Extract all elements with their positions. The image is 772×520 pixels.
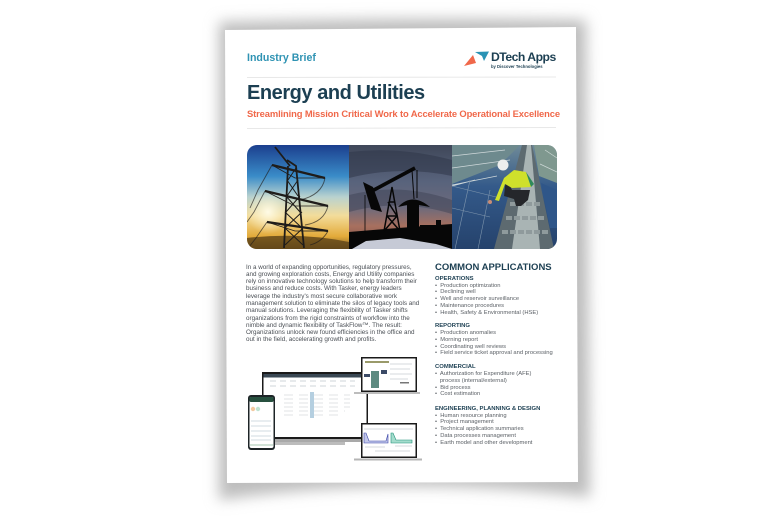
list: operations: OPERATIONS — [435, 276, 474, 282]
photo: oil pump jack — [349, 145, 452, 249]
list: operations: • Maintenance procedures — [435, 303, 504, 309]
lower small laptop — [354, 423, 422, 460]
list: engineering: • Earth model and other development — [435, 440, 532, 446]
intro paragraph: organizations from the rigid constraints of workflow into the — [246, 315, 410, 322]
upper small laptop — [354, 357, 420, 394]
list: reporting: REPORTING — [435, 323, 470, 329]
logo icon — [464, 52, 489, 66]
product device mockups — [248, 357, 422, 460]
list: reporting: • Morning report — [435, 337, 478, 343]
connector bar — [366, 394, 368, 423]
divider lines — [247, 77, 556, 128]
list: commercial — [435, 364, 532, 397]
logo wordmark: by Discover Technologies — [491, 64, 543, 69]
list: commercial: • Authorization for Expenditure (AFE) — [435, 371, 531, 377]
list: engineering: • Technical application summaries — [435, 426, 524, 432]
list: operations: • Production optimization — [435, 282, 501, 288]
intro paragraph: leverage the industry's most secure collaborative work — [246, 293, 397, 300]
list: commercial: process (internal/external) — [440, 378, 507, 384]
list: engineering: • Project management — [435, 419, 494, 425]
intro paragraph: business and reduce costs. With Tasker, energy leaders — [246, 285, 402, 292]
list: operations: • Health, Safety & Environmental (HSE) — [435, 310, 538, 316]
list: operations: • Declining well — [435, 289, 476, 295]
heading: Industry Brief: Industry Brief — [247, 52, 316, 64]
title: Energy and Utilities — [247, 82, 425, 104]
intro paragraph: and growing exploration costs, Energy and Utility companies — [246, 271, 414, 278]
list: reporting — [435, 323, 553, 356]
list: operations — [435, 276, 538, 316]
phone — [248, 395, 275, 450]
list: engineering: • Human resource planning — [435, 412, 507, 418]
list: reporting: • Coordinating well reviews — [435, 344, 506, 350]
list: engineering: ENGINEERING, PLANNING & DESIGN — [435, 406, 540, 412]
list: engineering — [435, 406, 540, 446]
logo wordmark: DTech Apps — [491, 50, 556, 64]
list: commercial: COMMERCIAL — [435, 364, 476, 370]
subtitle: Streamlining Mission Critical Work to Accelerate Operational Excellence — [247, 108, 560, 118]
photo: solar panels and worker — [452, 145, 557, 249]
intro paragraph — [246, 264, 419, 343]
list: engineering: • Data processes management — [435, 433, 516, 439]
photo: power pylon — [246, 145, 349, 249]
hero image strip — [246, 145, 557, 249]
intro paragraph: manual solutions. Leveraging the flexibility of Tasker shifts — [246, 307, 408, 314]
intro paragraph: nimble and dynamic flexibility of TaskFlow™. The result: — [246, 322, 402, 329]
intro paragraph: out in the field, accelerating growth and profits. — [246, 336, 376, 343]
intro paragraph: management solution to eliminate the silos of legacy tools and — [246, 300, 419, 307]
list: reporting: • Production anomalies — [435, 330, 496, 336]
page — [225, 27, 578, 483]
intro paragraph: Organizations unlock new found efficiencies in the office and — [246, 329, 414, 336]
list: reporting: • Field service ticket approval and processing — [435, 350, 553, 356]
list: operations: • Well and reservoir surveillance — [435, 296, 519, 302]
page shadow — [211, 12, 598, 506]
large laptop — [259, 372, 368, 445]
heading: common applications: COMMON APPLICATIONS — [435, 262, 552, 273]
intro paragraph: In a world of expanding opportunities, regulatory pressures, — [246, 264, 412, 270]
list: commercial: • Cost estimation — [435, 391, 480, 397]
intro paragraph: rely on innovative technology solutions to help transform their — [246, 278, 417, 285]
list: commercial: • Bid process — [435, 385, 471, 391]
